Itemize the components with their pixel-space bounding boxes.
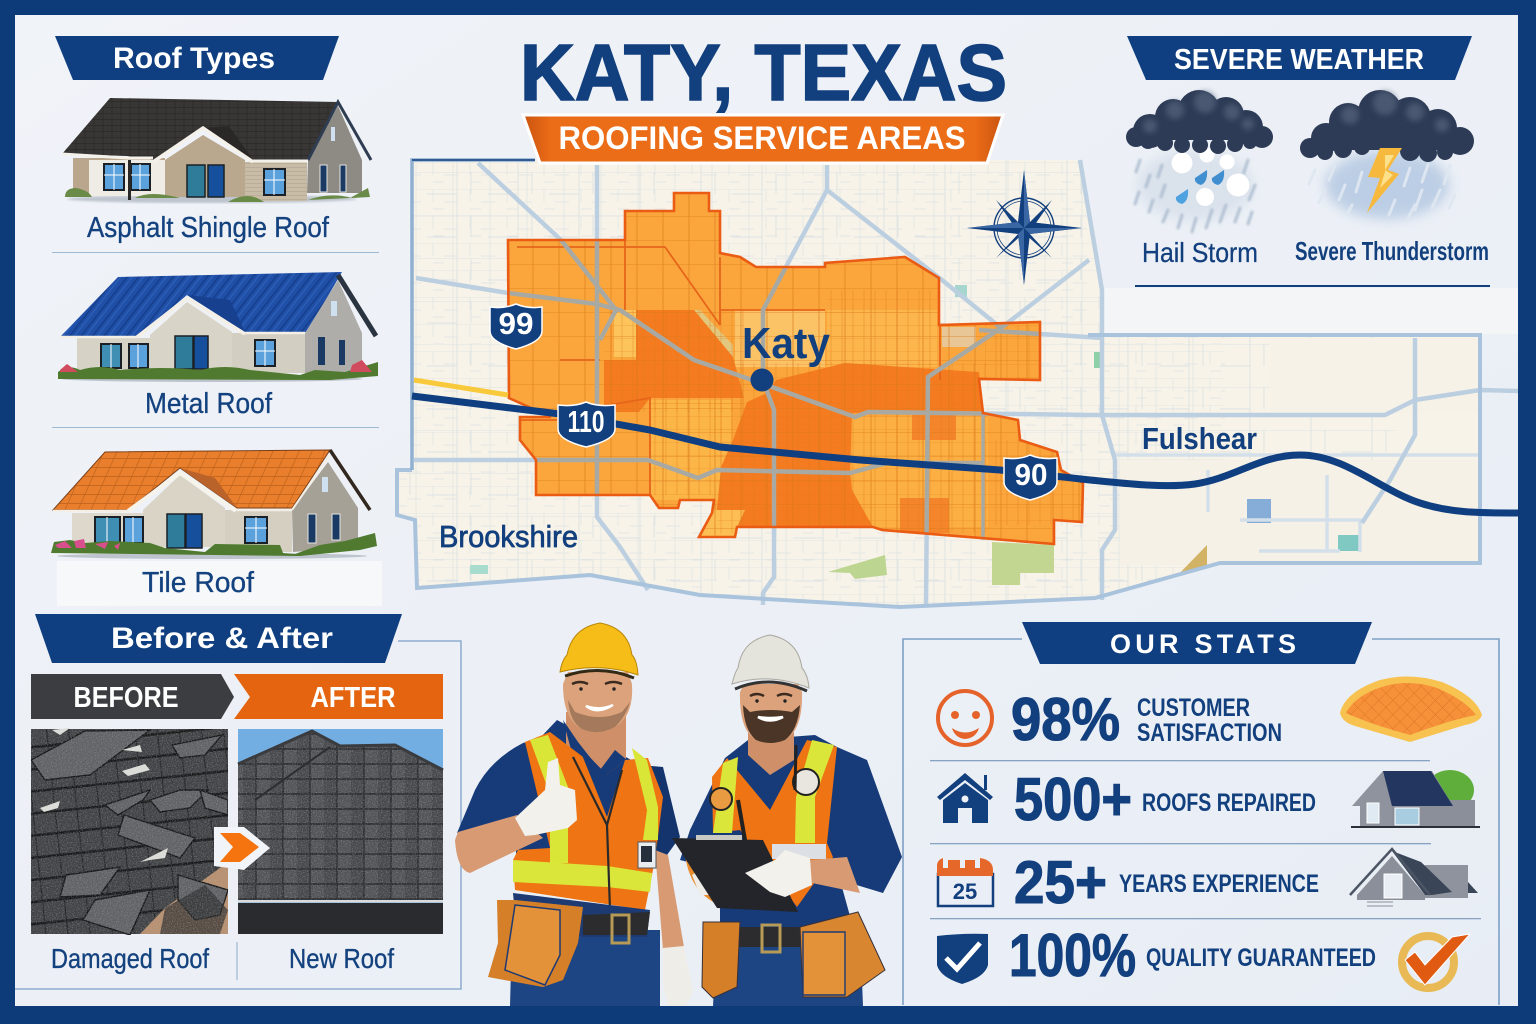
icon: thunderstorm bbox=[1300, 90, 1474, 219]
icon: grey house with tree bbox=[1351, 770, 1480, 828]
Katy location dot bbox=[750, 368, 774, 392]
panel: roof types bbox=[51, 36, 382, 606]
icon: hail storm bbox=[1126, 90, 1273, 232]
label: roofs repaired: ROOFS REPAIRED bbox=[1142, 789, 1316, 817]
highway shield 90: 90 bbox=[1014, 457, 1048, 492]
heading: roof types: Roof Types bbox=[113, 42, 275, 75]
label: quality guaranteed: QUALITY GUARANTEED bbox=[1146, 944, 1376, 972]
label: hail storm: Hail Storm bbox=[1142, 237, 1258, 268]
tab: before bbox=[31, 674, 234, 719]
icon: shield check bbox=[937, 934, 988, 984]
subtitle banner bbox=[523, 115, 1003, 163]
label: damaged roof: Damaged Roof bbox=[51, 943, 209, 974]
orange service zone bbox=[506, 192, 1084, 546]
label Katy: Katy bbox=[742, 319, 830, 368]
worker left bbox=[455, 623, 693, 1006]
label: new roof: New Roof bbox=[289, 943, 394, 974]
arrow: before to after bbox=[214, 827, 270, 870]
highway shield 110: 110 bbox=[568, 404, 604, 439]
worker right bbox=[672, 635, 902, 1006]
label: asphalt shingle roof: Asphalt Shingle Roof bbox=[87, 212, 330, 244]
photo: new roof bbox=[238, 729, 443, 934]
compass rose bbox=[967, 170, 1082, 285]
label: tile roof: Tile Roof bbox=[142, 567, 255, 599]
title: KATY, TEXAS bbox=[520, 28, 1007, 117]
stat: 100%: 100% bbox=[1009, 922, 1136, 989]
label: customer satisfaction: SATISFACTION bbox=[1137, 719, 1282, 747]
icon: smiley bbox=[938, 691, 992, 745]
heading: severe weather bbox=[1127, 36, 1472, 80]
heading: before and after bbox=[35, 614, 402, 663]
stat: 500+: 500+ bbox=[1014, 766, 1132, 833]
stat: 25+: 25+ bbox=[1014, 849, 1107, 916]
highway 90 line bbox=[412, 396, 1518, 513]
icon: house bbox=[937, 773, 993, 823]
heading: roof types bbox=[55, 36, 339, 80]
icon: grey house bbox=[1350, 849, 1478, 906]
highway shield 110 bbox=[558, 402, 615, 447]
panel: our stats bbox=[903, 622, 1499, 1005]
panel: severe weather bbox=[1126, 36, 1490, 287]
label: customer satisfaction: CUSTOMER bbox=[1137, 694, 1250, 722]
heading: our stats: OUR STATS bbox=[1110, 629, 1296, 659]
label: metal roof: Metal Roof bbox=[145, 388, 273, 420]
yellow road bbox=[414, 380, 508, 395]
house: metal roof bbox=[58, 272, 378, 382]
label: years experience: YEARS EXPERIENCE bbox=[1119, 870, 1319, 898]
label Brookshire: Brookshire bbox=[439, 519, 578, 554]
subtitle banner: ROOFING SERVICE AREAS bbox=[558, 120, 966, 156]
highway shield 90 bbox=[1004, 455, 1057, 500]
map of Katy service area bbox=[395, 155, 1518, 610]
icon: calendar bbox=[937, 858, 993, 906]
heading: before and after: Before & After bbox=[111, 622, 333, 655]
tab: before: BEFORE bbox=[74, 682, 178, 714]
label: tile roof bbox=[57, 561, 382, 606]
house: asphalt shingle bbox=[62, 98, 371, 203]
panel: before and after bbox=[15, 614, 461, 989]
icon: gold check badge bbox=[1402, 934, 1470, 988]
highway shield 99 bbox=[490, 304, 542, 349]
icon: shingle fan bbox=[1340, 676, 1482, 742]
house: tile roof bbox=[51, 450, 377, 559]
stat: 98%: 98% bbox=[1011, 686, 1120, 753]
highway shield 99: 99 bbox=[498, 306, 534, 341]
workers bbox=[455, 623, 902, 1006]
tab: after bbox=[234, 674, 443, 719]
label Fulshear: Fulshear bbox=[1142, 421, 1257, 456]
photo: damaged roof bbox=[31, 728, 228, 935]
label: customer satisfaction bbox=[1137, 694, 1282, 747]
icon: calendar: 25 bbox=[953, 879, 977, 904]
heading: our stats bbox=[1022, 622, 1372, 664]
heading: severe weather: SEVERE WEATHER bbox=[1174, 44, 1424, 76]
tab: after: AFTER bbox=[310, 682, 396, 714]
